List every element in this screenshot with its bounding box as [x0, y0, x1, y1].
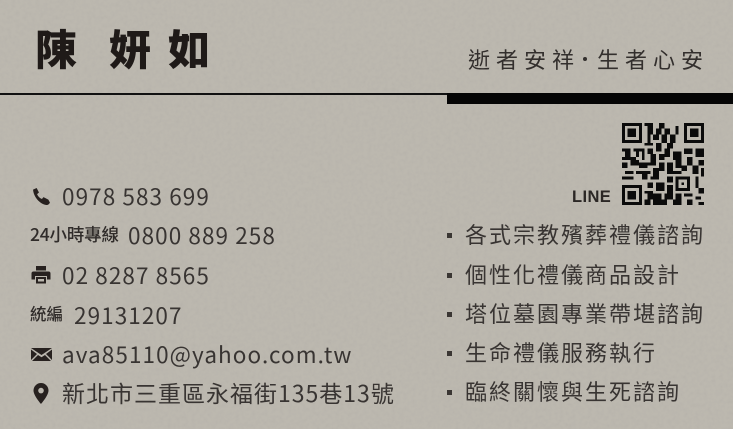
icon: envelope	[31, 348, 52, 361]
name heading: 陳	[35, 17, 77, 78]
address: 新北市三重區永福街135巷13號	[62, 375, 395, 409]
services list	[447, 218, 705, 407]
service item 2: 個性化禮儀商品設計	[465, 258, 681, 290]
name heading: 如	[168, 17, 210, 78]
header rule thick	[447, 93, 733, 104]
service item 1: 各式宗教殯葬禮儀諮詢	[465, 218, 705, 250]
service item 3: 塔位墓園專業帶堪諮詢	[465, 297, 705, 329]
icon: location pin	[34, 383, 48, 404]
header rule thin	[0, 93, 447, 95]
contact list	[30, 180, 395, 409]
slogan	[468, 43, 709, 75]
tax ID number: 29131207	[74, 299, 183, 331]
fax number: 02 8287 8565	[62, 259, 210, 291]
icon: phone	[33, 188, 50, 205]
24-hour line label: 24小時專線	[30, 222, 119, 247]
tax ID label: 統編	[30, 301, 63, 325]
icon: printer	[32, 266, 50, 284]
email address: ava85110@yahoo.com.tw	[62, 338, 353, 370]
hotline number: 0800 889 258	[128, 219, 276, 251]
QR code	[622, 123, 704, 205]
slogan: 生者心安	[597, 43, 709, 75]
name heading	[35, 17, 210, 78]
service item 5: 臨終關懷與生死諮詢	[465, 375, 681, 407]
phone number: 0978 583 699	[62, 180, 210, 212]
slogan: 逝者安祥	[468, 43, 580, 75]
service item 4: 生命禮儀服務執行	[465, 336, 657, 368]
name heading: 妍	[109, 17, 151, 78]
LINE label: LINE	[572, 188, 611, 206]
